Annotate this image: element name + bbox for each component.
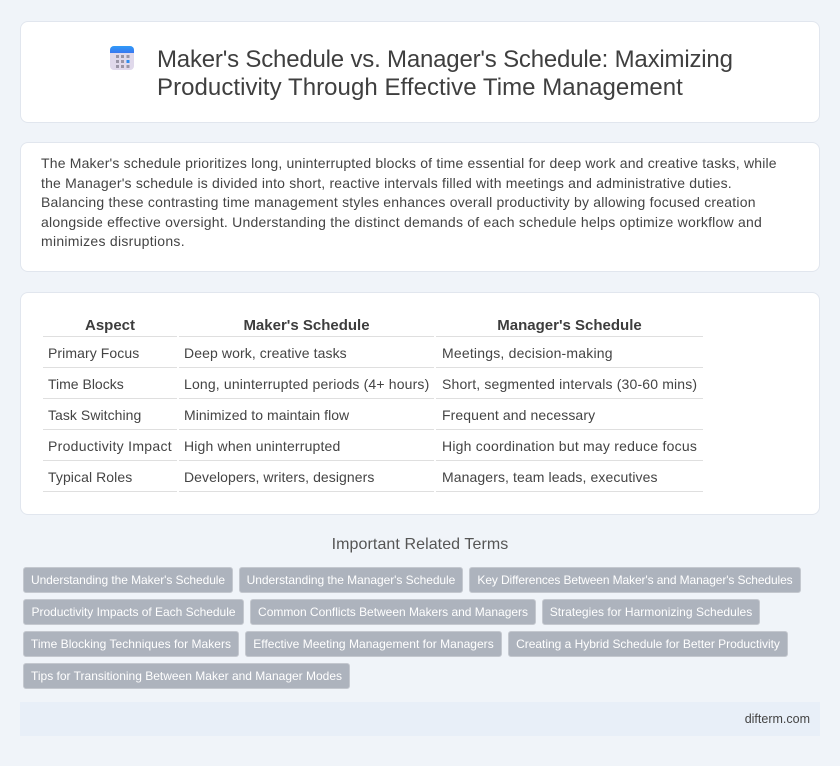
panel: header (20, 21, 820, 123)
heading: related terms: Important Related Terms (332, 536, 508, 553)
tag: Strategies for Harmonizing Schedules (550, 605, 752, 619)
row: typical roles: Typical Roles (48, 469, 132, 485)
row: task switching: Task Switching (48, 407, 141, 423)
icon: calendar (110, 46, 134, 70)
tag (23, 631, 239, 657)
intro text: The Maker's schedule prioritizes long, uninterrupted blocks of time essential for deep work and creative tasks, while (41, 155, 777, 171)
panel: comparison table (20, 292, 820, 515)
tag (23, 663, 350, 689)
row: typical roles: Developers, writers, designers (184, 469, 374, 485)
tag: Tips for Transitioning Between Maker and Manager Modes (31, 669, 342, 683)
tag: Understanding the Manager's Schedule (247, 573, 455, 587)
row: typical roles (48, 469, 658, 485)
row: primary focus: Meetings, decision-making (442, 345, 613, 361)
row: time blocks: Long, uninterrupted periods (4+ hours) (184, 376, 429, 392)
row: productivity impact: High when uninterrupted (184, 438, 340, 454)
panel: intro (20, 142, 820, 272)
tag: Effective Meeting Management for Managers (253, 637, 494, 651)
tag: Productivity Impacts of Each Schedule (31, 605, 236, 619)
title: Productivity Through Effective Time Management (157, 74, 683, 101)
tag: Creating a Hybrid Schedule for Better Productivity (516, 637, 780, 651)
title: Maker's Schedule vs. Manager's Schedule: Maximizing (157, 46, 733, 73)
tag: Understanding the Maker's Schedule (31, 573, 225, 587)
intro text: Balancing these contrasting time management styles enhances overall productivity by allowing focused creation (41, 194, 756, 210)
footer text: difterm.com (745, 712, 810, 726)
tag (469, 567, 801, 593)
row: primary focus: Primary Focus (48, 345, 139, 361)
comparison table (43, 317, 703, 492)
tag (250, 599, 536, 625)
row: time blocks: Time Blocks (48, 376, 124, 392)
footer bar (20, 702, 820, 736)
tag (508, 631, 788, 657)
tag: Key Differences Between Maker's and Manager's Schedules (477, 573, 793, 587)
intro text (41, 155, 777, 249)
row: productivity impact: High coordination but may reduce focus (442, 438, 697, 454)
row: productivity impact (48, 438, 697, 454)
table header: Aspect (85, 317, 135, 334)
row: primary focus (48, 345, 613, 361)
tag: Time Blocking Techniques for Makers (31, 637, 231, 651)
tag (239, 567, 463, 593)
row: productivity impact: Productivity Impact (48, 438, 172, 454)
title (157, 46, 733, 101)
tag group: related terms (23, 567, 801, 689)
row: task switching: Minimized to maintain flow (184, 407, 349, 423)
intro text: alongside effective oversight. Understanding the distinct demands of each schedule helps optimize workflow and (41, 214, 762, 230)
row: time blocks: Short, segmented intervals (30-60 mins) (442, 376, 697, 392)
table header (85, 317, 642, 334)
intro text: minimizes disruptions. (41, 233, 185, 249)
row: time blocks (48, 376, 697, 392)
tag: Common Conflicts Between Makers and Managers (258, 605, 528, 619)
row: task switching (48, 407, 596, 423)
tag (23, 567, 233, 593)
row: typical roles: Managers, team leads, executives (442, 469, 658, 485)
table header: Maker's Schedule (243, 317, 370, 334)
tag (542, 599, 760, 625)
row: primary focus: Deep work, creative tasks (184, 345, 347, 361)
tag (23, 599, 244, 625)
table header: Manager's Schedule (497, 317, 642, 334)
row: task switching: Frequent and necessary (442, 407, 595, 423)
tag (245, 631, 502, 657)
intro text: the Manager's schedule is divided into short, reactive intervals filled with meetings and administrative duties. (41, 175, 732, 191)
